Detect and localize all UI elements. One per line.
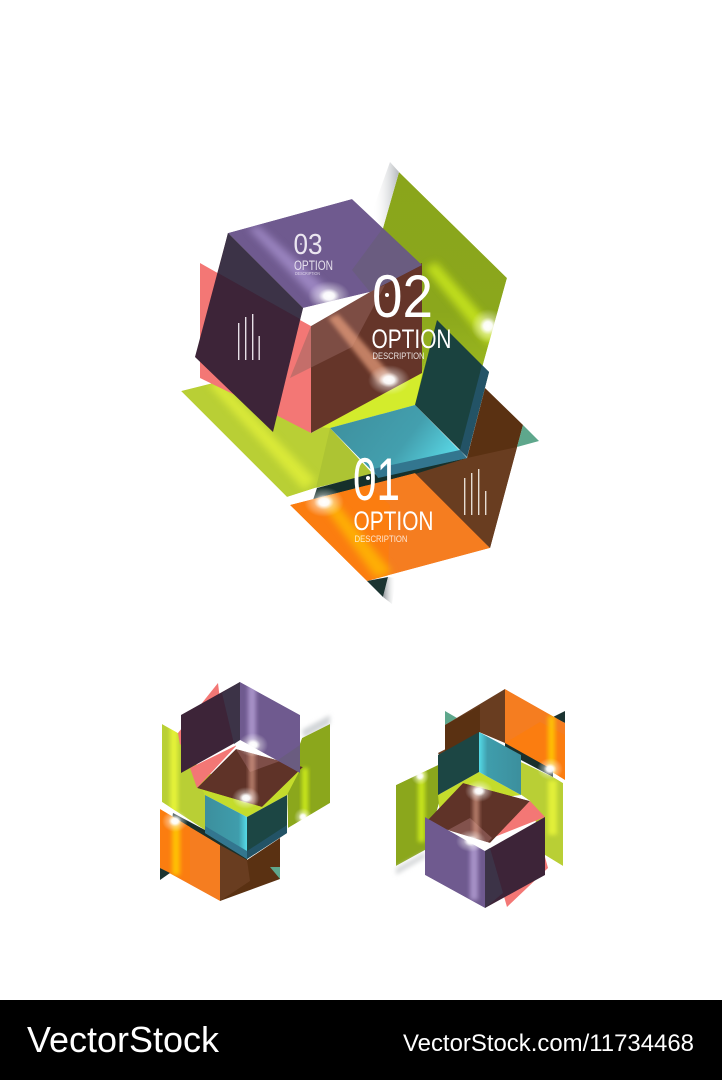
label: option 01: DESCRIPTION bbox=[354, 534, 408, 545]
panel: pink bbox=[492, 801, 548, 907]
white notch bbox=[448, 832, 490, 851]
panel: lime right bbox=[521, 762, 563, 866]
shadow top right bbox=[302, 715, 330, 738]
panel: brown center bbox=[425, 783, 530, 845]
lime center bbox=[185, 760, 300, 817]
panel: olive green bbox=[383, 172, 507, 405]
panel: orange bbox=[160, 809, 220, 901]
white notch bbox=[300, 292, 370, 326]
panel: lime left bbox=[162, 724, 205, 830]
shadow behind olive panel bbox=[372, 162, 399, 228]
panel: dark teal bbox=[415, 320, 489, 457]
icon: bars right bbox=[464, 469, 486, 515]
panel: olive left bbox=[396, 765, 440, 866]
lights bbox=[304, 281, 505, 517]
lights bbox=[411, 758, 563, 852]
footer logo: VectorStock bbox=[27, 1019, 220, 1060]
panel: purple 03 bbox=[228, 199, 422, 308]
label: option 01: OPTION bbox=[354, 506, 434, 536]
panel: teal bbox=[330, 405, 467, 478]
panel: dark teal bbox=[247, 795, 287, 859]
label: option 03 bbox=[294, 229, 333, 276]
panel: dark plum bbox=[195, 233, 303, 432]
panel: purple bbox=[425, 817, 485, 908]
label: option 02 bbox=[372, 263, 452, 362]
label: option 03: 03 bbox=[294, 229, 322, 261]
label: option 01: 01 bbox=[353, 446, 400, 513]
panel: brown top bbox=[438, 689, 505, 765]
dark strip bbox=[505, 743, 553, 777]
panel: dark teal bbox=[438, 732, 479, 795]
panel: teal bbox=[205, 795, 247, 859]
small teal corner bbox=[270, 867, 280, 879]
main infographic: three-option cube bbox=[181, 162, 539, 604]
panel: orange 01 bbox=[290, 473, 490, 581]
dark strip above orange bbox=[313, 458, 467, 500]
panel: lime green bbox=[181, 350, 428, 497]
panel: dark plum bbox=[181, 682, 240, 773]
icon: bars left bbox=[238, 314, 260, 360]
footer url: VectorStock.com/11734468 bbox=[403, 1030, 694, 1057]
dark triangle below orange bbox=[367, 577, 388, 597]
panel: pink bbox=[200, 263, 311, 433]
dark strip bbox=[172, 813, 247, 861]
label: option 02: OPTION bbox=[372, 324, 452, 354]
dark corner bbox=[553, 711, 565, 723]
dark corner bbox=[160, 868, 170, 880]
label: option 02: DESCRIPTION bbox=[372, 351, 425, 362]
panel: pink bbox=[178, 683, 237, 788]
panel: brown right bbox=[413, 388, 523, 548]
panel: olive right bbox=[287, 724, 330, 828]
panel: teal bbox=[479, 732, 521, 795]
panel: brown bbox=[197, 745, 303, 807]
small teal corner bbox=[445, 711, 457, 725]
shadow below orange bbox=[383, 577, 396, 604]
shadow under olive bbox=[396, 852, 425, 875]
panel: orange top bbox=[505, 689, 565, 780]
label: option 03: DESCRIPTION bbox=[295, 271, 320, 276]
label: option 01 bbox=[353, 446, 434, 545]
white notch bbox=[236, 740, 262, 750]
panel: dark plum bbox=[485, 817, 545, 908]
label: option 03: OPTION bbox=[294, 258, 333, 273]
panel: purple bbox=[240, 682, 303, 773]
lime center bbox=[438, 772, 521, 815]
footer bar bbox=[0, 1000, 722, 1080]
lower right cube variant bbox=[396, 689, 565, 908]
lower left cube variant bbox=[160, 682, 330, 901]
label: option 02: 02 bbox=[372, 263, 433, 330]
lights bbox=[162, 733, 312, 832]
panel: brown bottom bbox=[220, 838, 280, 901]
small teal corner bbox=[517, 425, 539, 447]
panel: brown 02 bbox=[290, 263, 422, 433]
